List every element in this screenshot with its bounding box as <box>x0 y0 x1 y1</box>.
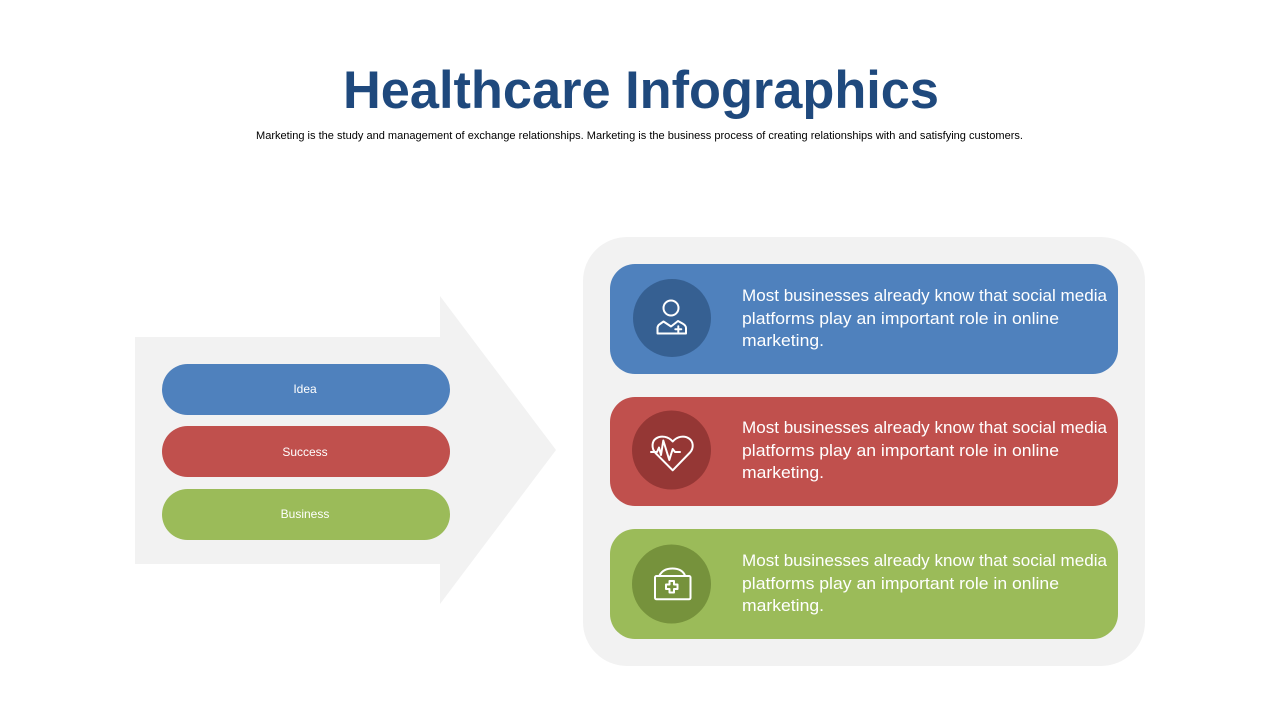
icon: doctor <box>633 279 711 357</box>
card text: marketing. <box>742 596 824 615</box>
card: red <box>610 397 1118 506</box>
card text: Most businesses already know that social media <box>742 551 1108 570</box>
card text: marketing. <box>742 463 824 482</box>
panel background <box>583 237 1145 666</box>
card text: marketing. <box>742 331 824 350</box>
pill: Idea <box>162 364 450 415</box>
pill: Success: Success <box>282 445 328 459</box>
card text: platforms play an important role in online <box>742 574 1059 593</box>
pill: Idea: Idea <box>293 382 317 396</box>
card text: Most businesses already know that social media <box>742 418 1108 437</box>
card text: Most businesses already know that social media <box>742 286 1108 305</box>
arrow shape <box>135 296 556 604</box>
card: blue <box>610 264 1118 374</box>
card text <box>742 551 1108 615</box>
pill: Business <box>162 489 450 540</box>
panel: left arrow <box>135 296 556 604</box>
pill: Business: Business <box>281 507 329 521</box>
card text <box>742 286 1108 350</box>
card text: platforms play an important role in online <box>742 441 1059 460</box>
icon: medical case <box>632 544 711 624</box>
card: green <box>610 529 1118 639</box>
pill: Success <box>162 426 450 477</box>
card text: platforms play an important role in online <box>742 309 1059 328</box>
subtitle: Marketing is the study and management of exchange relationships. Marketing is the business process of creating relationships with and satisfying customers. <box>256 130 1023 142</box>
panel: right background <box>583 237 1145 666</box>
icon: heart with pulse <box>632 410 711 490</box>
title: Healthcare Infographics <box>343 61 939 120</box>
card text <box>742 418 1108 482</box>
